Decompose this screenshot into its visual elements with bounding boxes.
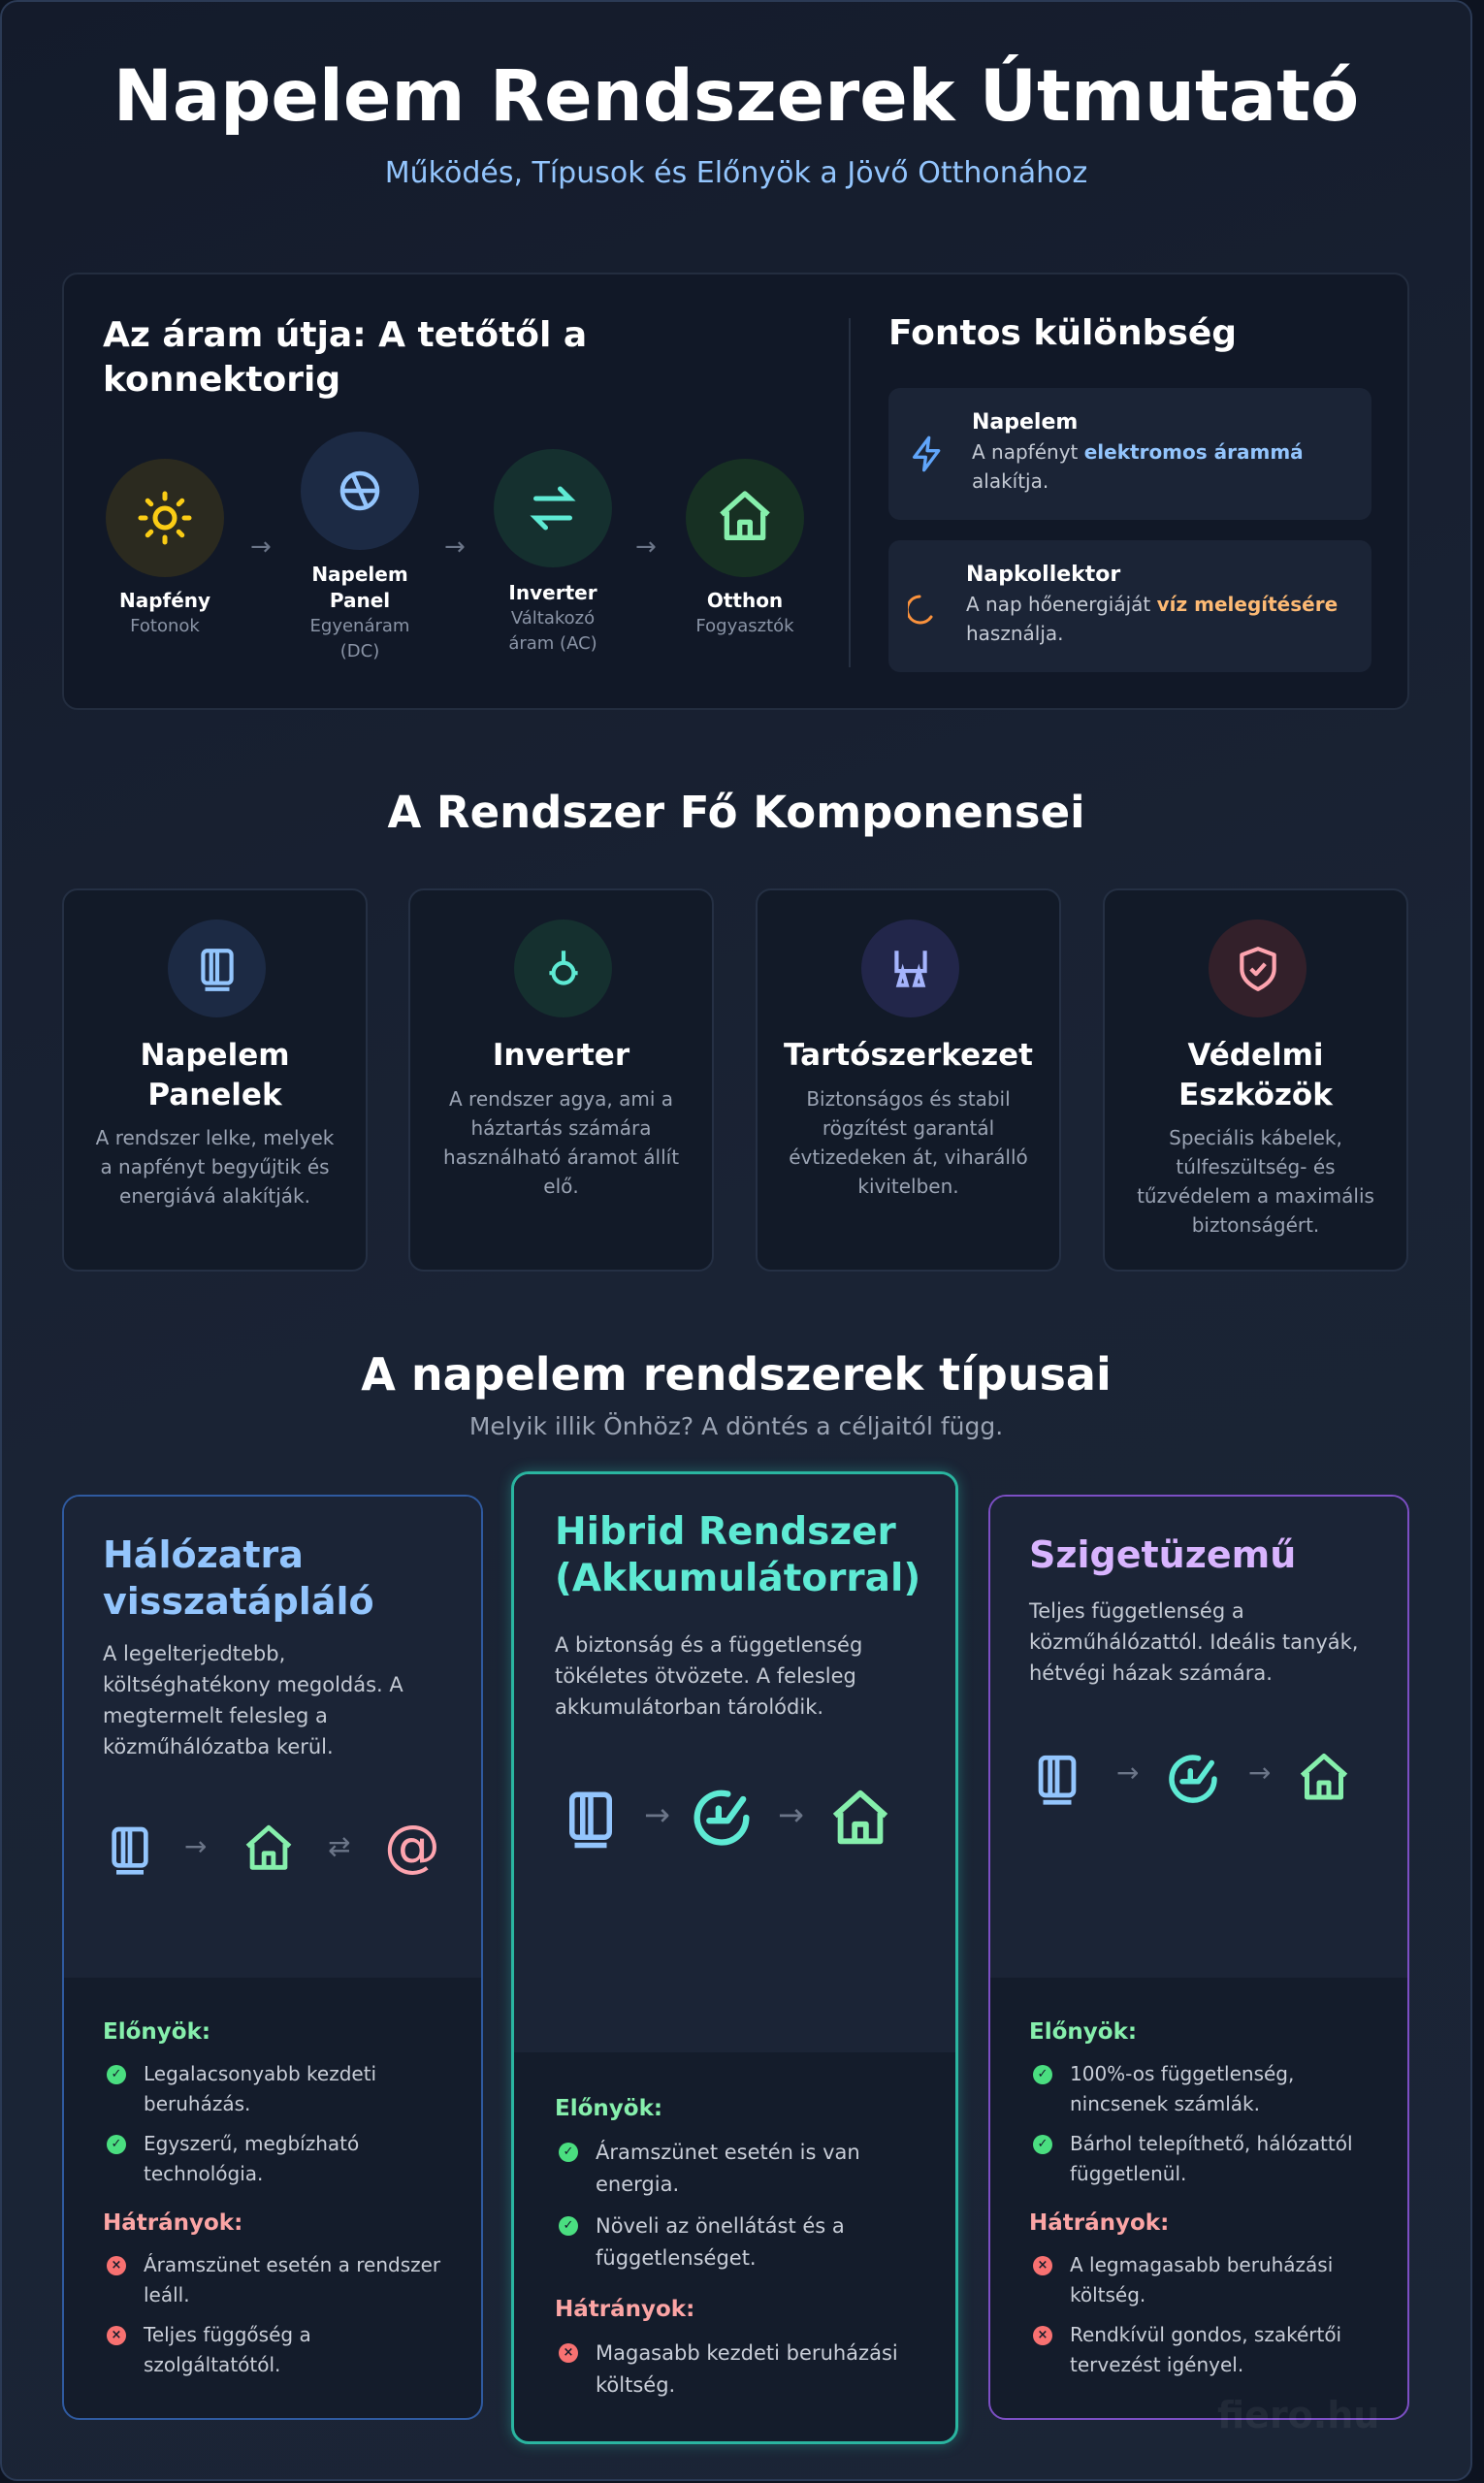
pros/cons: ✓ xyxy=(1038,2137,1048,2151)
type card: off-grid: Teljes függetlenség a közműhálózattól. Ideális tanyák, hétvégi házak számára. xyxy=(1029,1599,1358,1685)
type card: grid-tied xyxy=(62,1495,483,2420)
card: panels: A rendszer lelke, melyek a napfényt begyűjtik és energiává alakítják. xyxy=(96,1126,334,1208)
icons row: → xyxy=(184,1830,207,1862)
card: panels xyxy=(62,888,368,1272)
type card: grid-tied: A legelterjedtebb, költséghatékony megoldás. A megtermelt felesleg a közműhálózatba kerül. xyxy=(103,1642,403,1758)
flow step: inverter: Inverter xyxy=(508,581,597,604)
heading: difference: Fontos különbség xyxy=(888,313,1237,353)
pros/cons: × xyxy=(1038,2328,1048,2342)
type card: hybrid: (Akkumulátorral) xyxy=(555,1557,920,1600)
flow step: panel: (DC) xyxy=(340,641,379,661)
card: panels: Napelem xyxy=(140,1038,290,1073)
box: napelem: A napfényt elektromos árammá alakítja. xyxy=(972,440,1304,493)
type card: hybrid: A biztonság és a függetlenség tökéletes ötvözete. A felesleg akkumulátorban tárolódik. xyxy=(555,1633,862,1719)
flow step: home xyxy=(686,459,804,636)
pros/cons: × xyxy=(564,2345,573,2360)
pros/cons: ✓ xyxy=(564,2218,573,2233)
pros/cons: ✓ xyxy=(112,2067,121,2081)
card: protection: Eszközök xyxy=(1178,1078,1333,1113)
icon: shield xyxy=(1209,919,1307,1017)
pros/cons: Előnyök: xyxy=(1029,2019,1137,2045)
watermark: fiero.hu xyxy=(1217,2394,1379,2436)
card: protection xyxy=(1103,888,1408,1272)
icon: panel xyxy=(168,919,266,1017)
pros/cons: Teljes függőség a szolgáltatótól. xyxy=(144,2323,311,2376)
subtitle: Működés, Típusok és Előnyök a Jövő Otthonához xyxy=(385,156,1087,190)
card: mount: Tartószerkezet xyxy=(784,1038,1033,1073)
section heading: components: A Rendszer Fő Komponensei xyxy=(387,787,1085,838)
section heading: types: A napelem rendszerek típusai xyxy=(361,1348,1112,1401)
icons row xyxy=(1038,1754,1348,1805)
icons row xyxy=(569,1790,888,1849)
flow step: sunlight: Napfény xyxy=(119,589,210,612)
pros/cons: Előnyök: xyxy=(555,2096,662,2121)
pros/cons: × xyxy=(112,2328,121,2342)
flow step: sunlight: Fotonok xyxy=(130,616,200,636)
pros/cons: × xyxy=(1038,2258,1048,2273)
card: inverter: A rendszer agya, ami a háztartás számára használható áramot állít elő. xyxy=(443,1087,679,1198)
flow step: panel: Napelem xyxy=(311,563,408,586)
card: inverter xyxy=(408,888,714,1272)
pros/cons: × xyxy=(112,2258,121,2273)
type card: off-grid: Szigetüzemű xyxy=(1029,1533,1296,1576)
pros/cons: Áramszünet esetén a rendszer leáll. xyxy=(144,2253,440,2306)
card: protection: Védelmi xyxy=(1187,1038,1324,1073)
pros/cons xyxy=(555,2096,898,2397)
flow step: panel: Egyenáram xyxy=(310,616,409,636)
arrow: → xyxy=(444,532,466,562)
flow step: panel: Panel xyxy=(330,589,390,612)
card: inverter: Inverter xyxy=(493,1038,629,1073)
icons row: @ xyxy=(384,1813,440,1879)
pros/cons: Hátrányok: xyxy=(103,2210,242,2236)
pros/cons: Magasabb kezdeti beruházási költség. xyxy=(596,2341,898,2397)
icons row: → xyxy=(778,1796,804,1833)
type card: hybrid xyxy=(511,1471,958,2444)
flow step: inverter: áram (AC) xyxy=(508,633,597,654)
flow step: inverter: Váltakozó xyxy=(511,608,595,629)
box: napelem xyxy=(888,388,1371,520)
section subtitle: Melyik illik Önhöz? A döntés a céljaitól függ. xyxy=(469,1412,1003,1440)
pros/cons: A legmagasabb beruházási költség. xyxy=(1070,2253,1333,2306)
box: napkollektor xyxy=(888,540,1371,672)
type card: hybrid: Hibrid Rendszer xyxy=(555,1510,896,1554)
icon: inverter xyxy=(514,919,612,1017)
card: mount: Biztonságos és stabil rögzítést garantál évtizedeken át, viharálló kivitelben. xyxy=(789,1087,1028,1198)
icon: mount xyxy=(861,919,959,1017)
icons row: → xyxy=(1116,1757,1139,1789)
pros/cons: Hátrányok: xyxy=(555,2297,694,2322)
box: napelem: Napelem xyxy=(972,410,1078,435)
pros/cons: Hátrányok: xyxy=(1029,2210,1169,2236)
card: protection: Speciális kábelek, túlfeszültség- és tűzvédelem a maximális biztonságért. xyxy=(1137,1126,1374,1237)
pros/cons: ✓ xyxy=(112,2137,121,2151)
pros/cons xyxy=(103,2019,440,2376)
pros/cons: Bárhol telepíthető, hálózattól függetlenül. xyxy=(1070,2132,1353,2185)
pros/cons: Rendkívül gondos, szakértői tervezést igényel. xyxy=(1070,2323,1341,2376)
title: Napelem Rendszerek Útmutató xyxy=(113,55,1359,138)
type card: off-grid xyxy=(988,1495,1409,2420)
flow step: sunlight xyxy=(106,459,224,636)
pros/cons: ✓ xyxy=(564,2144,573,2159)
icons row: → xyxy=(1248,1757,1271,1789)
flow step: home: Fogyasztók xyxy=(695,616,794,636)
icons row xyxy=(112,1813,440,1879)
icons row: ⇄ xyxy=(328,1830,350,1862)
box: napkollektor: Napkollektor xyxy=(966,563,1120,587)
pros/cons: Növeli az önellátást és a függetlenséget. xyxy=(596,2214,845,2270)
type card: grid-tied: visszatápláló xyxy=(103,1580,374,1623)
pros/cons: Legalacsonyabb kezdeti beruházás. xyxy=(144,2062,376,2115)
pros/cons: ✓ xyxy=(1038,2067,1048,2081)
flow step: home: Otthon xyxy=(707,589,783,612)
card: panels: Panelek xyxy=(147,1078,282,1113)
card: mount xyxy=(756,888,1061,1272)
type card: grid-tied: Hálózatra xyxy=(103,1533,304,1576)
box: napkollektor: A nap hőenergiáját víz melegítésére használja. xyxy=(966,593,1338,645)
pros/cons: Egyszerű, megbízható technológia. xyxy=(144,2132,359,2185)
heading: power path: Az áram útja: A tetőtől a konnektorig xyxy=(103,315,587,400)
pros/cons: Áramszünet esetén is van energia. xyxy=(596,2141,860,2196)
pros/cons xyxy=(1029,2019,1353,2376)
pros/cons: Előnyök: xyxy=(103,2019,210,2045)
arrow: → xyxy=(250,532,272,562)
flow step: inverter xyxy=(494,449,612,654)
panel: power flow and difference xyxy=(62,273,1409,710)
icons row: → xyxy=(644,1796,670,1833)
arrow: → xyxy=(635,532,657,562)
pros/cons: 100%-os függetlenség, nincsenek számlák. xyxy=(1070,2062,1294,2115)
flow step: panel xyxy=(301,432,419,661)
